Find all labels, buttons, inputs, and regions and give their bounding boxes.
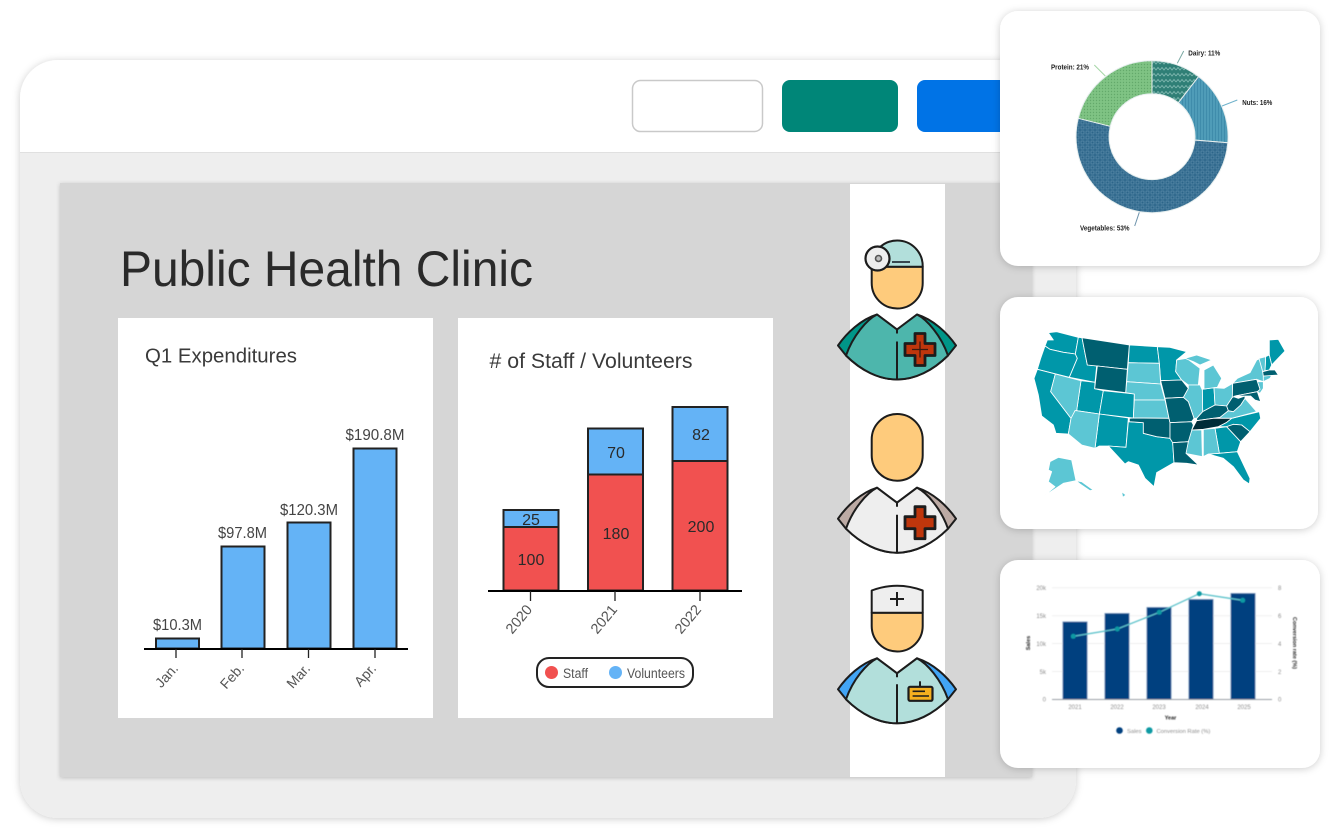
- bar chart: $120.3M: [280, 502, 338, 519]
- darkest state: [1192, 418, 1232, 430]
- bar chart: Jan.: [152, 660, 181, 691]
- window header: [20, 60, 1076, 152]
- combo chart: 2023: [1152, 705, 1166, 711]
- combo chart: 6: [1278, 614, 1282, 620]
- bar chart: $10.3M: [153, 617, 202, 634]
- segment: protein: [1078, 61, 1152, 126]
- donut labels: Dairy: 11%: [1188, 48, 1221, 58]
- stacked bar chart: 25: [522, 512, 540, 529]
- panel: staff and volunteers: [458, 318, 773, 718]
- combo chart: 2024: [1195, 705, 1209, 711]
- stacked bar chart: 2021: [588, 602, 621, 637]
- window frame: [20, 60, 1076, 818]
- donut labels: [1051, 48, 1273, 233]
- combo chart: 0: [1278, 698, 1282, 704]
- combo chart: Conversion rate (%): [1291, 617, 1297, 669]
- stacked bar chart: 100: [518, 552, 544, 569]
- combo chart: Sales: [1026, 636, 1032, 650]
- chart legend: Sales: [1127, 729, 1142, 735]
- bar chart: [144, 427, 408, 692]
- panel: Q1 expenditures: [118, 318, 433, 718]
- content panel: [60, 183, 1032, 777]
- icon: doctor: [838, 240, 956, 380]
- panel: map card: [1000, 297, 1318, 529]
- title: Public Health Clinic: [120, 241, 533, 297]
- combo chart: [1026, 586, 1297, 735]
- panel: donut chart card: [1000, 11, 1320, 266]
- combo chart: 0: [1043, 698, 1047, 704]
- segment: nuts: [1178, 77, 1228, 143]
- stacked bar chart: 200: [688, 519, 714, 536]
- bar chart: $190.8M: [346, 427, 404, 444]
- bar chart: Apr.: [351, 660, 379, 690]
- donut chart: [1076, 61, 1228, 213]
- donut labels: Vegetables: 53%: [1080, 224, 1130, 233]
- donut labels: Nuts: 16%: [1242, 98, 1273, 107]
- stacked bar chart: 82: [692, 427, 710, 444]
- legend: Staff: [563, 666, 588, 681]
- chart legend: Conversion Rate (%): [1156, 729, 1210, 735]
- icon: physician: [838, 414, 956, 553]
- combo chart: 5k: [1040, 670, 1047, 676]
- donut labels: Protein: 21%: [1051, 62, 1090, 72]
- icon: nurse: [838, 586, 956, 723]
- stacked bar chart: 70: [607, 445, 625, 462]
- combo chart: 2025: [1237, 705, 1251, 711]
- chart heading: # of Staff / Volunteers: [490, 350, 692, 373]
- panel: sales combo chart card: [1000, 560, 1320, 768]
- combo chart: 2022: [1110, 705, 1124, 711]
- bar chart: $97.8M: [218, 525, 267, 542]
- legend: [537, 658, 693, 687]
- stacked bar chart: 180: [603, 526, 629, 543]
- combo chart: 2: [1278, 670, 1282, 676]
- stacked bar chart: [488, 407, 742, 687]
- choropleth map of US states: [1034, 332, 1285, 497]
- segment: vegetables: [1076, 118, 1228, 213]
- combo chart: 8: [1278, 586, 1282, 592]
- staff strip: [850, 184, 945, 777]
- bar chart: Feb.: [217, 660, 247, 692]
- bar chart: Mar.: [283, 660, 313, 691]
- legend: Volunteers: [627, 666, 685, 681]
- combo chart: 15k: [1036, 614, 1047, 620]
- combo chart: 20k: [1036, 586, 1047, 592]
- button: green: [782, 80, 898, 132]
- combo chart: 10k: [1036, 642, 1047, 648]
- chart heading: Q1 Expenditures: [145, 346, 297, 368]
- chart legend: [1116, 727, 1210, 735]
- button: blue: [917, 80, 1017, 132]
- combo chart: 2021: [1068, 705, 1082, 711]
- app window: [20, 60, 1076, 818]
- combo chart: Year: [1165, 716, 1177, 722]
- stacked bar chart: 2020: [503, 602, 536, 637]
- segment: dairy: [1152, 61, 1199, 103]
- combo chart: 4: [1278, 642, 1282, 648]
- stacked bar chart: 2022: [672, 602, 705, 637]
- button: outline: [632, 80, 762, 132]
